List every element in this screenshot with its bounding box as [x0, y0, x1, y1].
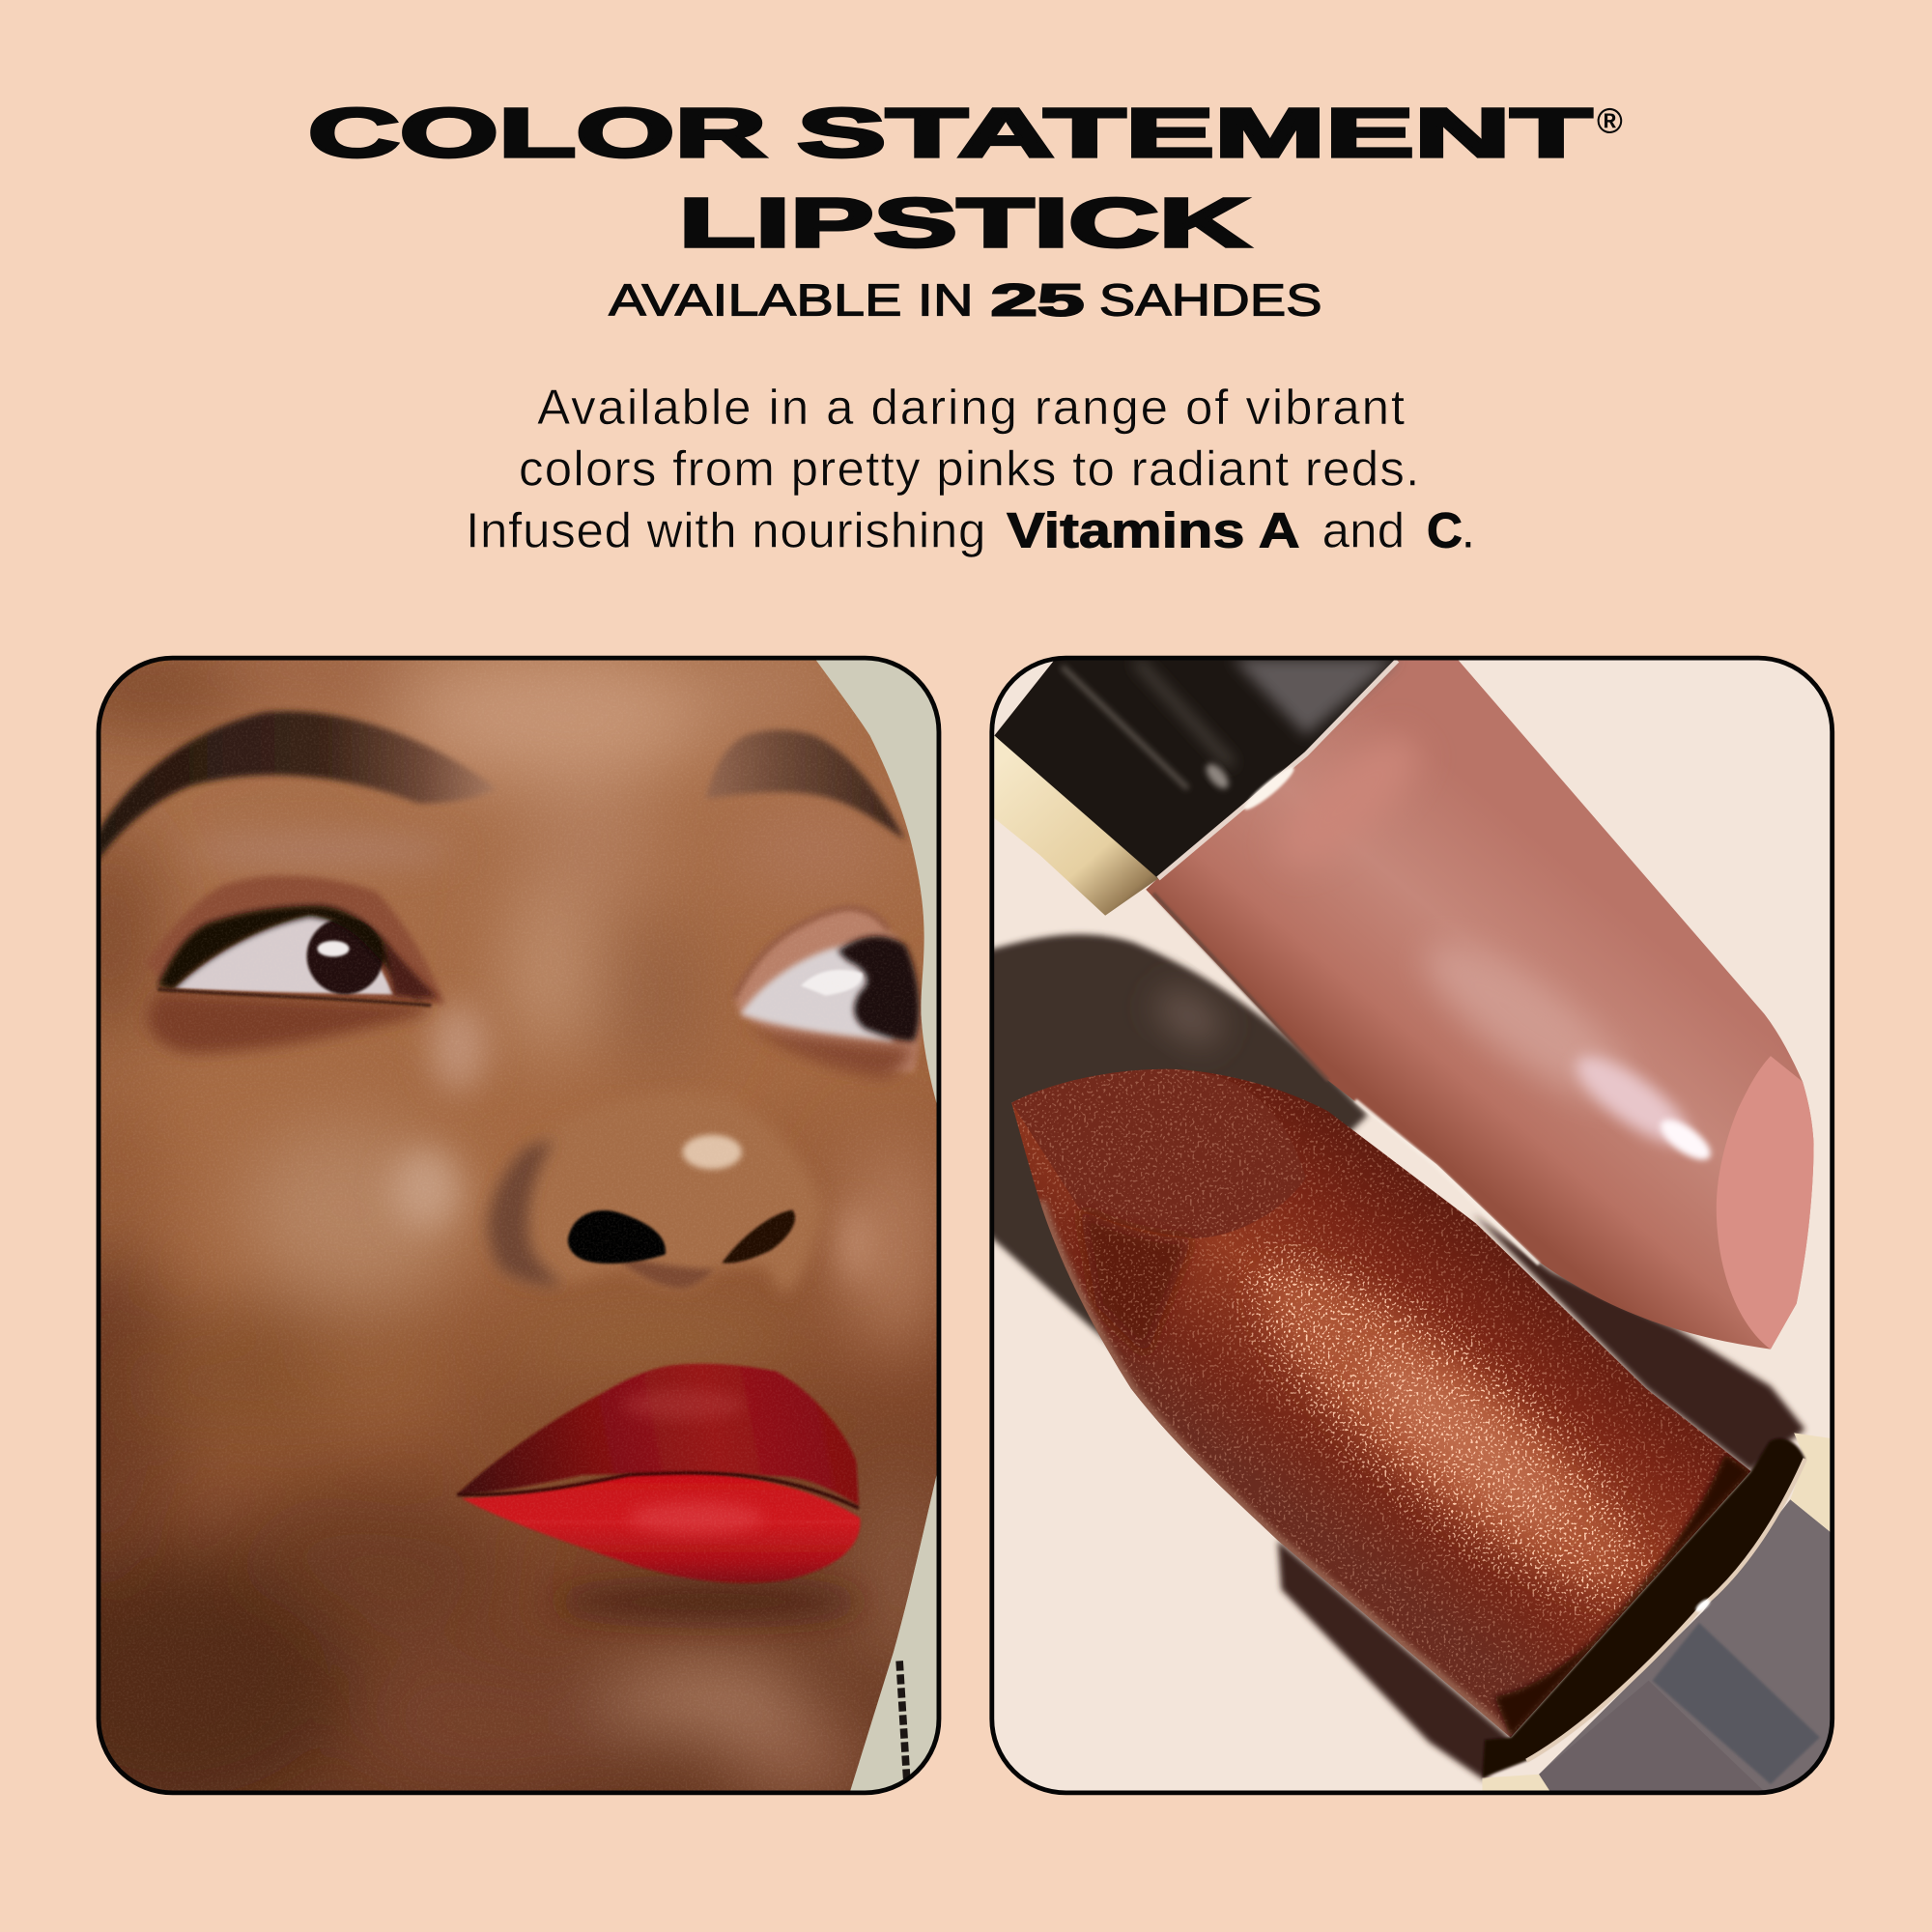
iris: [307, 918, 384, 994]
panel: face photo: [100, 661, 937, 1791]
description text: .: [1462, 502, 1475, 557]
panel borders: [99, 658, 1833, 1793]
lips: [457, 1364, 860, 1583]
description text: colors from pretty pinks to radiant reds.: [519, 441, 1419, 497]
title: [308, 95, 1623, 262]
pink highlight: [1406, 921, 1649, 1125]
title: LIPSTICK: [679, 185, 1249, 262]
right eye: [734, 908, 922, 1078]
nose: [488, 1093, 824, 1293]
title: ®: [1597, 101, 1623, 141]
subtitle: SAHDES: [1099, 275, 1322, 326]
subtitle: AVAILABLE IN: [609, 275, 974, 326]
lower lid: [148, 992, 431, 1054]
backdrop: [992, 658, 1833, 1793]
pink lipstick flat cut: [1717, 1056, 1814, 1350]
lashes: [157, 906, 425, 1005]
skin grain: [86, 645, 949, 1804]
description text: C: [1427, 502, 1463, 557]
title: COLOR: [308, 95, 766, 172]
sclera: [174, 914, 393, 994]
description text: Infused with nourishing: [466, 502, 985, 557]
nostrils: [568, 1210, 666, 1264]
description text: Vitamins A: [1007, 502, 1300, 557]
upper lid: [146, 876, 444, 1005]
pink lipstick: [1146, 658, 1814, 1350]
dark collar interior: [1482, 1438, 1805, 1778]
red metallic lipstick: [998, 1060, 1786, 1749]
backdrop behind face: [816, 661, 937, 1791]
cast shadows: [985, 934, 1805, 1780]
subtitle: 25: [991, 275, 1084, 326]
panel: lipstick photo: [985, 658, 1836, 1799]
gray lipstick tube: [1482, 1433, 1836, 1799]
gold collar: [1482, 1433, 1836, 1799]
description text: and: [1322, 502, 1405, 557]
description text: Available in a daring range of vibrant: [537, 380, 1405, 435]
left eye: [146, 876, 444, 1054]
black lipstick tube: [994, 658, 1397, 916]
hair braid: [899, 1661, 907, 1780]
face skin: [100, 661, 937, 1791]
eyebrows: [96, 711, 905, 863]
title: STATEMENT: [797, 95, 1592, 172]
shimmer: [998, 1060, 1786, 1749]
subtitle: [609, 275, 1322, 326]
description text: [466, 380, 1475, 557]
